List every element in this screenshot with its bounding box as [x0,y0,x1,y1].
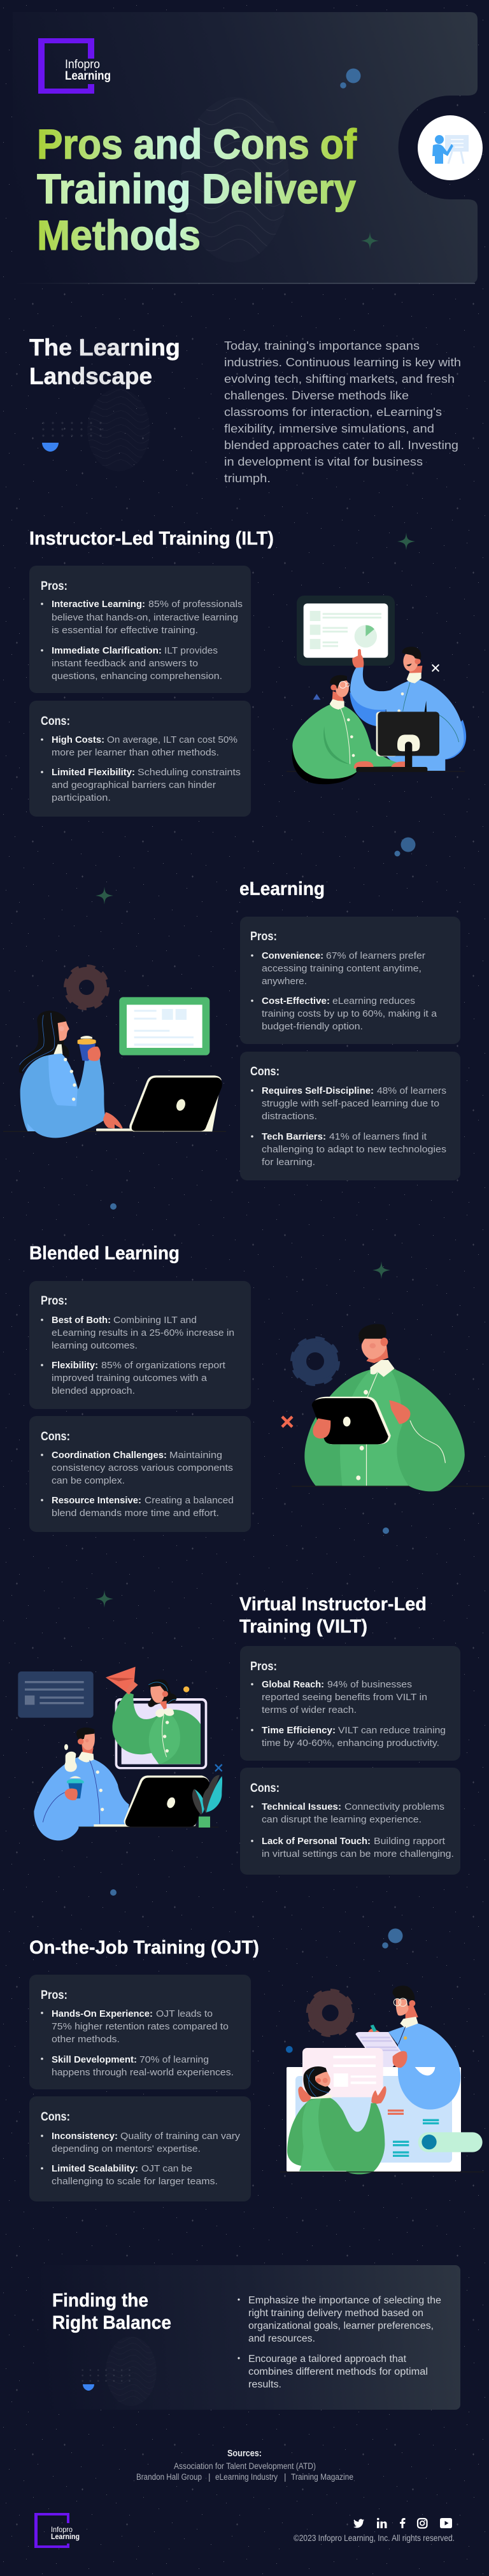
balance bullet list: right training delivery method based on [248,2308,423,2319]
panel: eLearning cons: challenging to adapt to new technologies [262,1144,446,1155]
panel: blended pros: 85% of organizations report [101,1360,226,1371]
panel: VILT pros: VILT can reduce training [338,1725,446,1736]
intro paragraph: flexibility, immersive simulations, and [224,422,434,435]
panel: VILT cons [240,1768,460,1875]
logo: Infopro [65,58,100,71]
panel: VILT pros: terms of wider reach. [262,1705,357,1715]
panel: ILT cons: participation. [52,792,111,803]
heading: right balance: Finding the [52,2290,148,2311]
icon: linkedin [377,2518,387,2528]
panel: ILT pros: instant feedback and answers to [52,658,198,669]
panel: ILT pros: questions, enhancing comprehension. [52,671,222,682]
decoration: star [372,1261,390,1279]
footer logo [34,2513,80,2548]
panel: ILT pros [29,566,251,693]
panel: ILT cons: Limited Flexibility: [52,767,135,778]
panel: OJT cons: Quality of training can vary [120,2131,241,2142]
panel: eLearning cons: 48% of learners [377,1085,446,1096]
intro paragraph: blended approaches cater to all. Investing [224,439,458,452]
decoration: star and dot [96,1528,389,1608]
panel: OJT pros: happens through real-world experiences. [52,2067,234,2078]
heading: ILT: Instructor-Led Training (ILT) [29,528,274,549]
intro paragraph: industries. Continuous learning is key with [224,356,461,369]
panel: blended cons: consistency across various components [52,1463,233,1473]
panel: VILT pros: Pros: [250,1660,277,1673]
panel: ILT cons: On average, ILT can cost 50% [107,734,237,745]
heading: right balance: Right Balance [52,2312,171,2333]
balance bullet list: Encourage a tailored approach that [248,2354,407,2365]
panel: blended pros: Flexibility: [52,1360,98,1371]
heading: VILT: Virtual Instructor-Led [239,1594,427,1615]
balance bullet list: results. [248,2379,281,2390]
footer logo: Learning [51,2532,80,2541]
icon: twitter [353,2519,364,2528]
panel: OJT cons: depending on mentors' expertise. [52,2143,201,2154]
panel: blended cons: Maintaining [169,1450,222,1461]
panel: VILT cons: can disrupt the learning experience. [262,1814,422,1825]
panel: ILT cons: Cons: [41,715,70,728]
balance bullet list: combines different methods for optimal [248,2366,428,2377]
sources: Training Magazine [291,2472,353,2482]
balance bullet list: Emphasize the importance of selecting the [248,2295,441,2306]
icon: instagram [418,2519,427,2528]
section heading: the learning landscape: The Learning [29,334,180,361]
panel: OJT cons [29,2096,251,2201]
panel: ILT cons: High Costs: [52,734,104,745]
panel: eLearning cons: for learning. [262,1157,315,1168]
panel: OJT pros: 75% higher retention rates compared to [52,2021,229,2032]
panel: eLearning cons: Requires Self-Discipline: [262,1085,374,1096]
sources: Sources: [227,2448,262,2459]
panel: blended cons: Coordination Challenges: [52,1450,167,1461]
heading: OJT: On-the-Job Training (OJT) [29,1937,259,1958]
panel: eLearning pros: training costs by up to 60%, making it a [262,1008,437,1019]
illustration: instructor and learner at monitor [287,596,466,784]
panel: VILT pros: 94% of businesses [327,1679,412,1690]
panel: blended cons [29,1416,251,1532]
logo [38,38,111,94]
decoration: wave, dots and half circle [42,389,150,471]
panel: ILT pros: is essential for effective training. [52,625,198,636]
panel: ILT cons: Scheduling constraints [138,767,241,778]
heading: VILT [239,1594,427,1637]
panel: OJT cons: OJT can be [141,2163,192,2174]
panel: eLearning pros: accessing training content anytime, [262,963,422,974]
intro paragraph: in development is vital for business [224,455,423,468]
decoration: stars and dots, upper [96,533,415,905]
title: Pros and Cons of [37,120,357,168]
intro paragraph [224,340,461,485]
sources: | [284,2472,287,2482]
panel: OJT pros: Hands-On Experience: [52,2008,153,2019]
logo: Learning [65,69,111,83]
panel: eLearning cons: Tech Barriers: [262,1131,326,1142]
section heading: the learning landscape: Landscape [29,363,152,389]
panel: eLearning pros: 67% of learners prefer [326,950,425,961]
panel: VILT pros: reported seeing benefits from VILT in [262,1692,427,1703]
panel: blended pros: learning outcomes. [52,1340,138,1351]
illustration: man with tablet [292,1324,489,1491]
panel: ILT pros: Pros: [41,580,67,593]
balance bullet list [237,2295,441,2390]
panel: eLearning cons: distractions. [262,1111,317,1122]
icon: gear blue [293,1339,337,1384]
illustration: woman with laptop and coffee [3,997,226,1138]
panel: ILT cons [29,701,251,817]
panel: finding the right balance [41,2265,460,2410]
sources: | [208,2472,211,2482]
copyright: ©2023 Infopro Learning, Inc. All rights reserved. [294,2533,455,2543]
panel: OJT cons: Limited Scalability: [52,2163,138,2174]
panel: VILT cons: Cons: [250,1782,280,1795]
panel: OJT pros [29,1975,251,2089]
icon: gear [66,967,107,1008]
balance bullet list: and resources. [248,2333,315,2344]
sources: Brandon Hall Group [136,2472,202,2482]
panel: VILT cons: Connectivity problems [344,1801,444,1812]
panel: blended cons: can be complex. [52,1475,125,1486]
panel: VILT cons: in virtual settings can be more challenging. [262,1849,454,1859]
panel: eLearning cons [240,1052,460,1180]
panel: blended pros: eLearning results in a 25-60% increase in [52,1327,234,1338]
panel: OJT cons: Cons: [41,2110,70,2124]
section heading: the learning landscape [29,334,180,389]
panel: blended cons: Cons: [41,1430,70,1443]
icon: gear [309,1991,352,2035]
panel: blended pros: Combining ILT and [113,1315,197,1326]
icon: youtube [440,2518,452,2528]
panel: eLearning pros: Convenience: [262,950,323,961]
intro paragraph: challenges. Diverse methods like [224,389,409,402]
panel: blended pros: Best of Both: [52,1315,111,1326]
heading: blended learning: Blended Learning [29,1243,180,1264]
hero panel [13,12,478,284]
intro paragraph: classrooms for interaction, eLearning's [224,406,442,419]
panel: OJT pros: Pros: [41,1989,67,2002]
icon: facebook [400,2518,405,2528]
panel: blended cons: Resource Intensive: [52,1495,141,1506]
panel: VILT pros: time by 40-60%, enhancing productivity. [262,1738,439,1749]
sources: Association for Talent Development (ATD) [174,2461,316,2471]
panel: OJT pros: 70% of learning [139,2054,209,2065]
panel: OJT pros: Skill Development: [52,2054,137,2065]
heading: eLearning: eLearning [239,878,325,899]
footer logo: Infopro [51,2525,73,2534]
panel: ILT pros: ILT provides [164,645,218,656]
panel: eLearning pros [240,917,460,1044]
panel: blended pros [29,1281,251,1409]
decoration: dots [110,1889,402,1949]
panel: eLearning cons: Cons: [250,1065,280,1078]
panel: OJT pros: OJT leads to [156,2008,213,2019]
social icons [353,2518,452,2528]
intro paragraph: triumph. [224,472,271,485]
sources: eLearning Industry [215,2472,278,2482]
panel: VILT pros [240,1646,460,1761]
panel: eLearning pros: budget-friendly option. [262,1021,363,1032]
panel: ILT cons: and geographical barriers can hinder [52,780,216,791]
panel: eLearning cons: 41% of learners find it [329,1131,427,1142]
intro paragraph: evolving tech, shifting markets, and fresh [224,373,455,385]
panel: blended cons: Creating a balanced [145,1495,234,1506]
decoration: dot [110,1203,117,1210]
panel: ILT pros: 85% of professionals [148,599,243,610]
heading: right balance [52,2290,171,2333]
title: Training Delivery [37,165,356,212]
panel: OJT cons: challenging to scale for larger teams. [52,2176,218,2187]
panel: eLearning cons: struggle with self-paced learning due to [262,1098,439,1109]
panel: blended pros: blended approach. [52,1385,135,1396]
panel: VILT cons: Building rapport [374,1836,446,1847]
panel: blended pros: Pros: [41,1294,67,1308]
intro paragraph: Today, training's importance spans [224,340,420,352]
panel: OJT pros: other methods. [52,2034,120,2045]
panel: VILT pros: Global Reach: [262,1679,324,1690]
panel: eLearning pros: anywhere. [262,976,307,987]
panel: blended pros: improved training outcomes with a [52,1373,208,1384]
panel: eLearning pros: Pros: [250,930,277,943]
panel: ILT pros: Interactive Learning: [52,599,145,610]
illustration: virtual instructor on screen and learner [18,1667,222,1840]
illustration: colleagues at whiteboard [280,1986,484,2174]
panel: ILT pros: believe that hands-on, interactive learning [52,612,238,623]
panel: VILT pros: Time Efficiency: [262,1725,336,1736]
panel: OJT cons: Inconsistency: [52,2131,118,2142]
sources [136,2448,353,2482]
panel: eLearning pros: Cost-Effective: [262,996,330,1006]
panel: eLearning pros: eLearning reduces [332,996,415,1006]
panel: ILT cons: more per learner than other methods. [52,747,219,758]
icon: orange x [282,1417,292,1427]
icon: trainer at board [418,115,483,180]
heading: VILT: Training (VILT) [239,1616,367,1637]
balance bullet list: organizational goals, learner preferences, [248,2321,434,2331]
title [37,120,357,259]
panel: VILT cons: Lack of Personal Touch: [262,1836,371,1847]
panel: VILT cons: Technical Issues: [262,1801,341,1812]
panel: blended cons: blend demands more time and effort. [52,1508,219,1519]
panel: ILT pros: Immediate Clarification: [52,645,162,656]
title: Methods [37,211,201,259]
